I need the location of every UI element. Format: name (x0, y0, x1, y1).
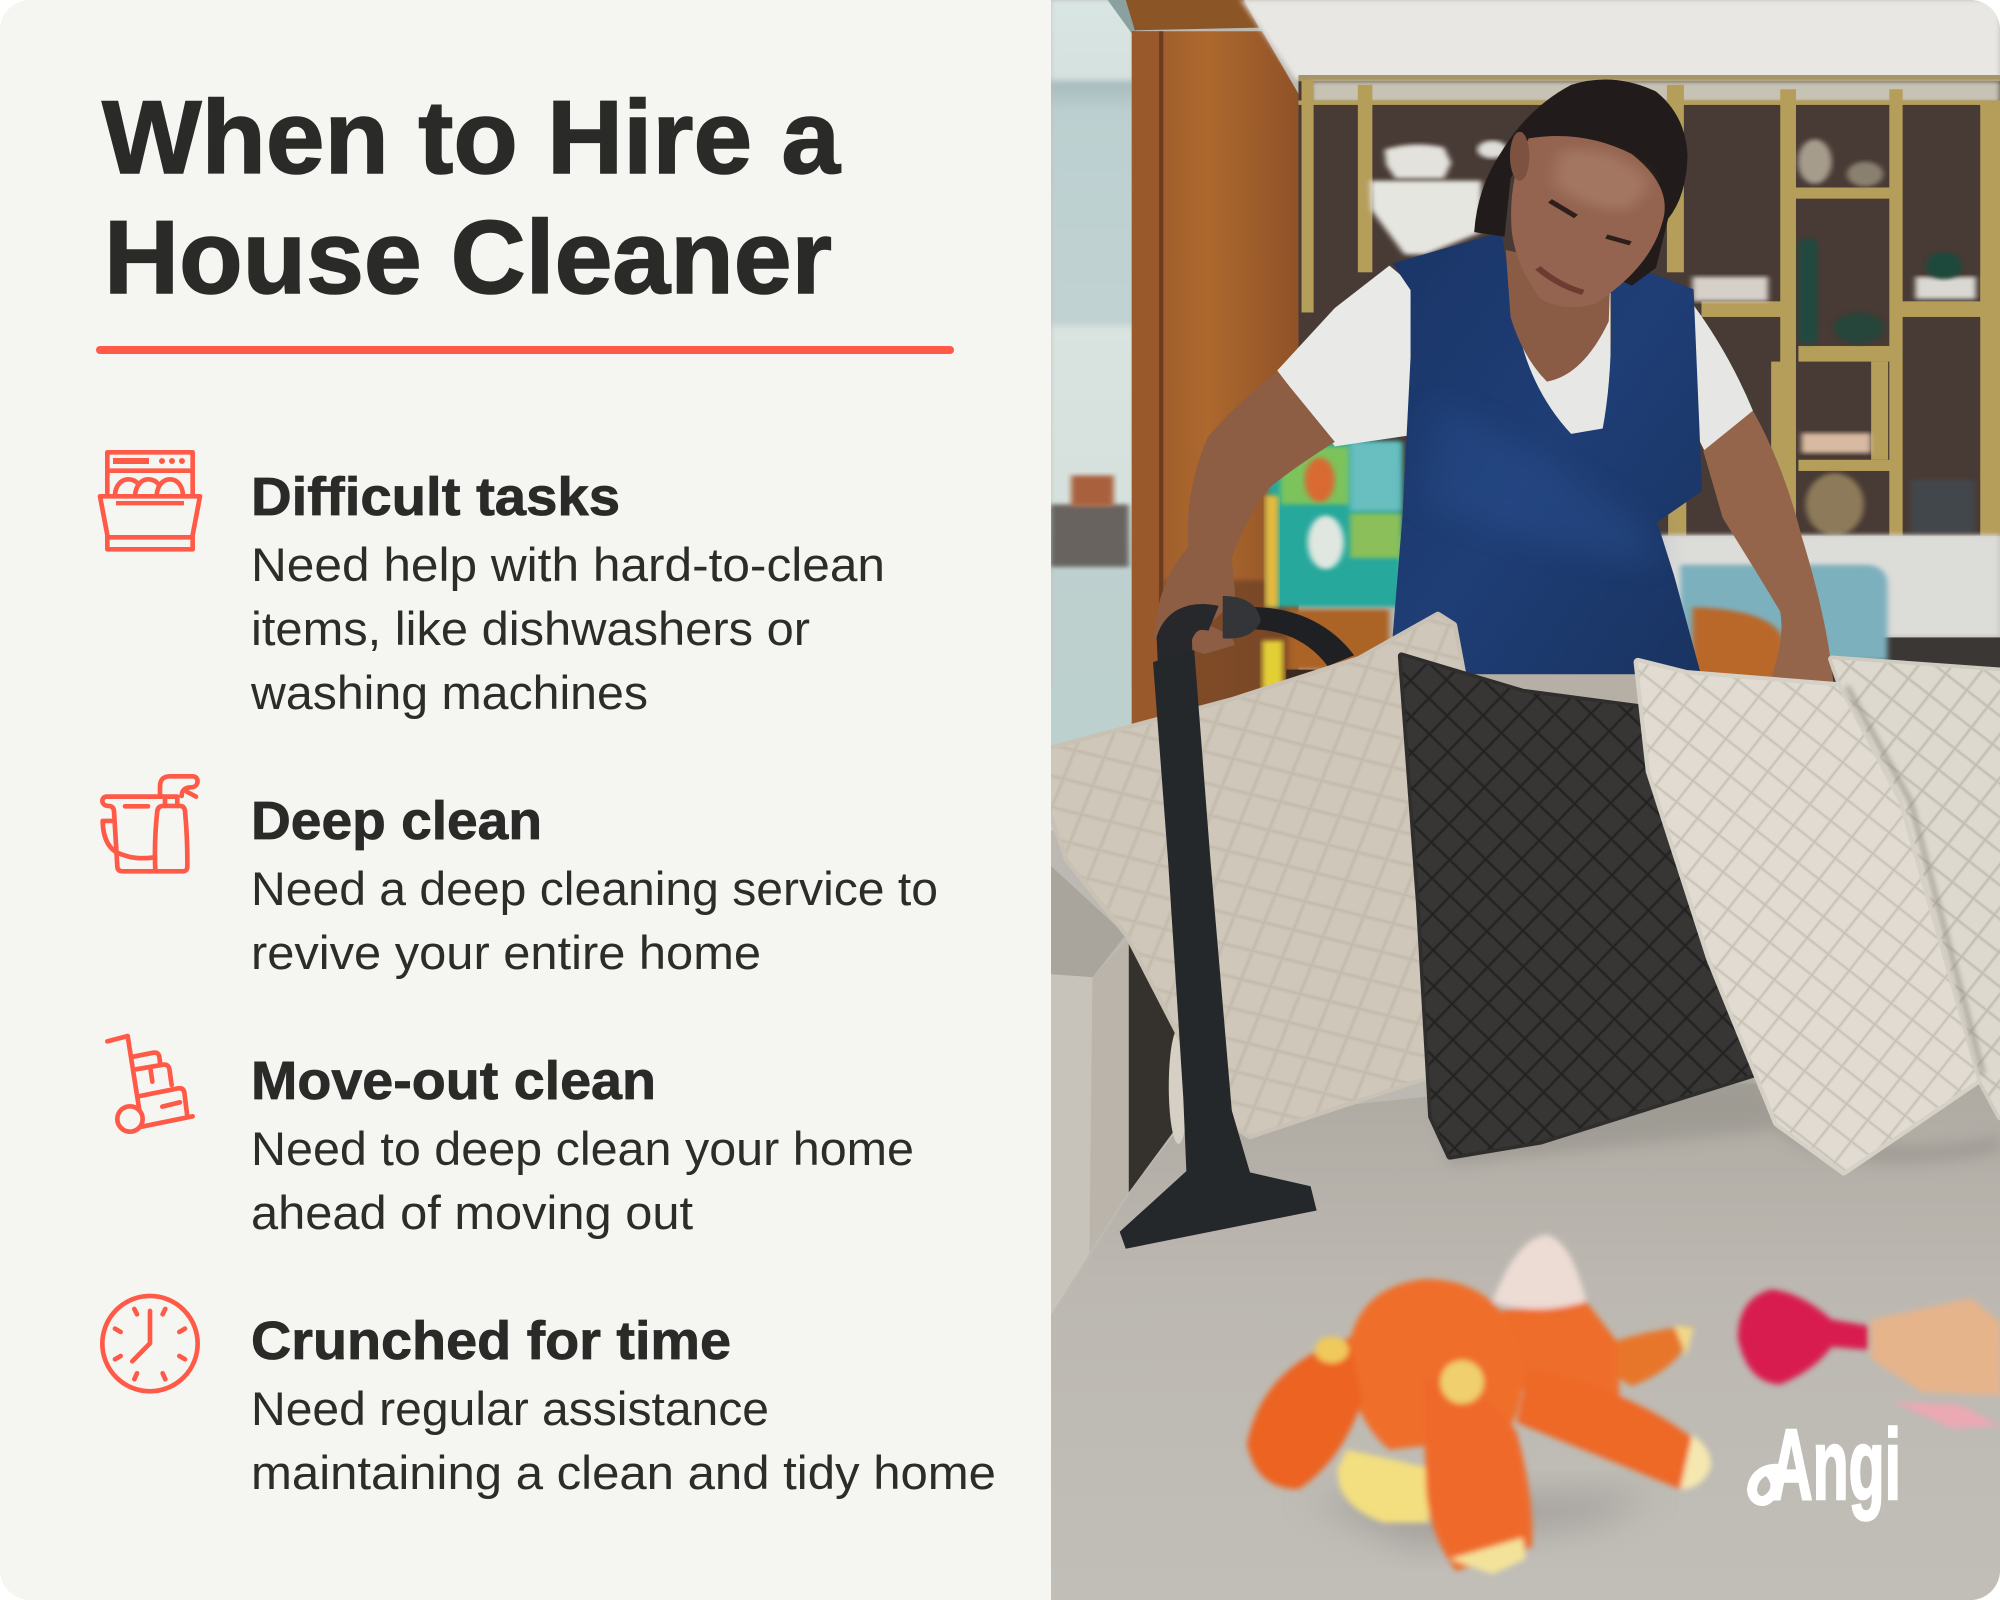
logo swash (1752, 1469, 1785, 1501)
woman (1277, 266, 1414, 446)
photo background: room and shelves (1050, 0, 2000, 830)
body: crunched for time: Need regular assistance (251, 1382, 769, 1435)
heading: deep clean: Deep clean (251, 791, 542, 851)
logo: Angi (1747, 1425, 1898, 1522)
body: move-out clean: ahead of moving out (251, 1186, 693, 1239)
body: move-out clean (251, 1122, 914, 1239)
body: crunched for time (251, 1382, 996, 1499)
photo foreground: sofa, pillows, vacuum, toys (1050, 616, 2000, 1600)
photo: woman vacuuming a sofa (1050, 0, 2000, 1600)
icon: bucket and spray bottle (102, 776, 198, 871)
beige pillow (1050, 616, 1462, 1135)
title: House Cleaner (104, 200, 832, 316)
body: crunched for time: maintaining a clean and tidy home (251, 1446, 996, 1499)
panel: left text background (0, 0, 1051, 1600)
body: deep clean: revive your entire home (251, 926, 761, 979)
icon: dishwasher (100, 452, 200, 549)
icon: clock (102, 1296, 198, 1391)
vacuum handle (1174, 617, 1214, 703)
vacuum tube and nozzle (1120, 650, 1317, 1249)
dark pillow (1401, 656, 1753, 1156)
logo: Angi: Angi (1770, 1409, 1901, 1521)
body: difficult tasks: items, like dishwashers or (251, 602, 810, 655)
title underline (96, 346, 954, 354)
item: crunched for time (102, 1296, 996, 1499)
art (1268, 442, 1401, 607)
body: deep clean: Need a deep cleaning service to (251, 862, 938, 915)
right pillow (1638, 662, 1977, 1171)
item: deep clean (102, 776, 938, 979)
orange toy (1247, 1235, 1711, 1574)
title: When to Hire a (102, 80, 841, 196)
far-right pillow (1832, 659, 2000, 1117)
body: difficult tasks: Need help with hard-to-clean (251, 538, 885, 591)
heading: crunched for time: Crunched for time (251, 1311, 731, 1371)
body: move-out clean: Need to deep clean your home (251, 1122, 914, 1175)
item: move-out clean (107, 1036, 914, 1239)
heading: difficult tasks: Difficult tasks (251, 467, 620, 527)
heading: move-out clean: Move-out clean (251, 1051, 656, 1111)
body: difficult tasks: washing machines (250, 666, 648, 719)
body: deep clean (251, 862, 938, 979)
icon: hand truck with boxes (107, 1036, 193, 1132)
title (101, 96, 842, 295)
item: difficult tasks (100, 452, 885, 719)
chairs (1289, 609, 1389, 670)
body: difficult tasks (250, 538, 885, 719)
rattle toy (1738, 1289, 2000, 1429)
sofa arm (1050, 865, 1185, 1317)
sofa seat (1136, 1084, 2000, 1600)
toy shadows (1305, 1492, 1656, 1547)
